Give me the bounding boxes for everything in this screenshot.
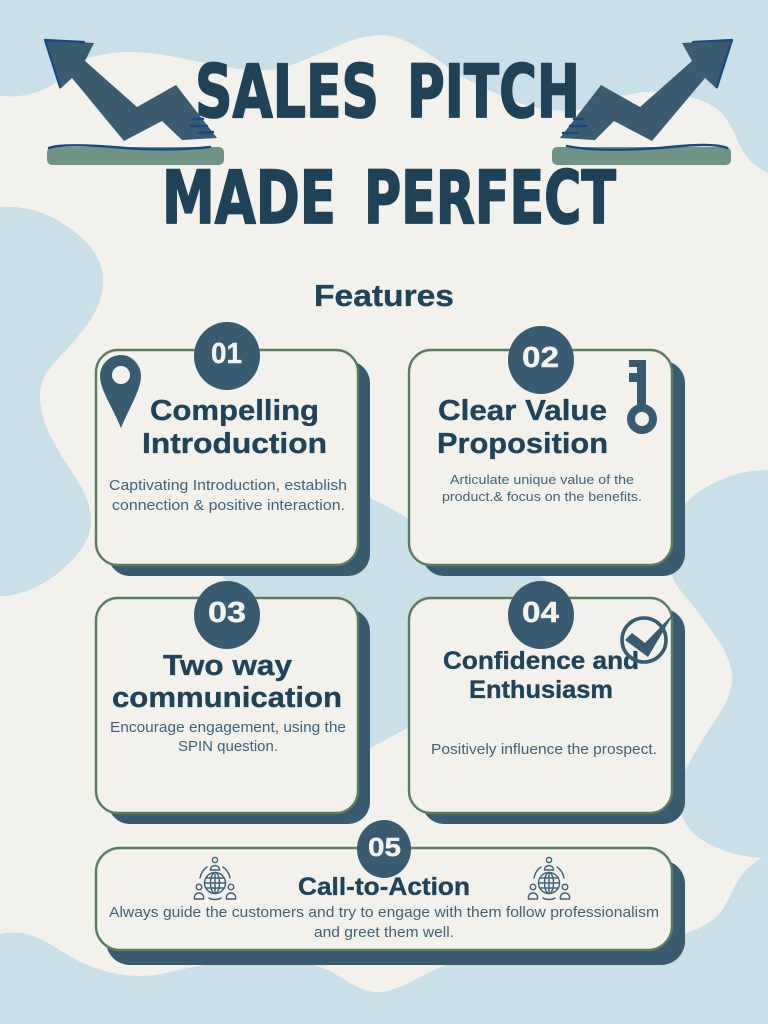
number badge 05: 05	[368, 832, 401, 862]
icon: left rising arrow on base	[45, 40, 224, 165]
card heading: communication	[112, 682, 342, 714]
card heading	[437, 395, 608, 460]
title: SALES	[195, 50, 379, 135]
icon: right rising arrow on base	[552, 40, 732, 165]
card text: Encourage engagement, using the	[110, 720, 346, 736]
icon: location pin	[100, 355, 141, 428]
panel: compelling introduction	[96, 322, 370, 576]
heading: features: Features	[314, 278, 454, 313]
panel: two way communication	[96, 581, 370, 824]
card heading: Proposition	[437, 428, 608, 460]
card heading: Call-to-Action	[298, 873, 470, 901]
icon: global people right	[528, 857, 570, 900]
card text	[109, 478, 347, 514]
card text	[442, 472, 642, 504]
card heading	[443, 647, 639, 704]
title	[162, 50, 616, 241]
card heading	[112, 650, 342, 714]
number badge 02: 02	[522, 342, 559, 374]
number badge 04: 04	[522, 597, 559, 629]
card text: Captivating Introduction, establish	[109, 478, 347, 494]
card heading: Confidence and	[443, 647, 639, 675]
card heading: Two way	[163, 650, 292, 682]
number badge 03: 03	[208, 597, 246, 629]
number badge 05	[357, 820, 411, 878]
card text: product.& focus on the benefits.	[442, 489, 642, 504]
icon: check mark in circle	[622, 613, 674, 662]
card text: Always guide the customers and try to engage with them follow professionalism	[109, 905, 659, 921]
card text: Articulate unique value of the	[450, 472, 634, 487]
title: PERFECT	[364, 156, 616, 241]
card text: connection & positive interaction.	[112, 498, 345, 514]
number badge 01: 01	[211, 338, 242, 370]
number badge 01	[194, 322, 260, 390]
card heading: Introduction	[142, 428, 327, 460]
number badge 02	[508, 326, 574, 394]
icon: global people left	[194, 857, 236, 900]
panel: confidence and enthusiasm	[409, 581, 685, 824]
card heading	[142, 395, 327, 460]
card text: and greet them well.	[314, 925, 454, 941]
number badge 04	[508, 581, 574, 649]
icon: key	[629, 360, 653, 430]
title: PITCH	[407, 50, 580, 135]
card heading: Clear Value	[438, 395, 607, 427]
card heading: Enthusiasm	[469, 676, 613, 704]
title: MADE	[162, 156, 336, 241]
number badge 03	[194, 581, 260, 649]
panel: clear value proposition	[409, 326, 685, 576]
panel: call to action	[96, 820, 685, 965]
card text: SPIN question.	[178, 739, 278, 755]
card text	[110, 720, 346, 755]
card text	[109, 905, 659, 941]
card heading: Compelling	[150, 395, 319, 427]
card text: Positively influence the prospect.	[431, 742, 657, 758]
